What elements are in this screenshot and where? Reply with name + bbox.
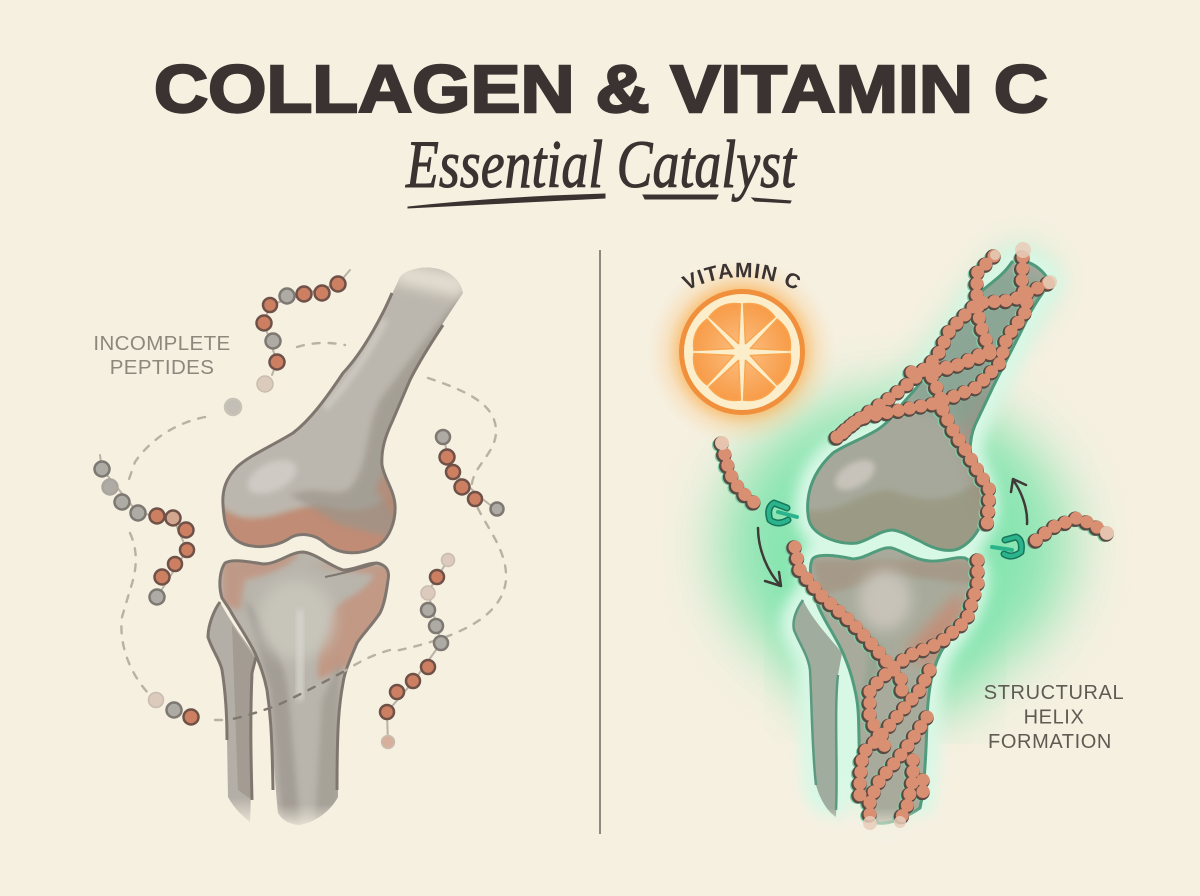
peptide chain: top [225,270,350,415]
icon: glowing fibula [793,600,842,817]
faded strand ends [715,242,1114,830]
icon: glowing tibia [810,548,976,835]
icon: enzyme clip left [769,503,797,523]
label: structural helix formation: STRUCTURAL [984,682,1124,704]
peptide chain: right [436,430,504,516]
label: structural helix formation: FORMATION [988,731,1112,753]
divider [599,250,601,834]
peptide chain: left [94,455,194,604]
label: vitamin c curved: VITAMIN C [680,262,800,288]
panel: right, helix formation [654,232,1124,830]
label: incomplete peptides: PEPTIDES [110,356,214,379]
icon: glowing femur [805,260,1050,560]
label: structural helix formation: HELIX [1024,706,1084,728]
title: COLLAGEN & VITAMIN C [154,52,1048,127]
arrow: down into tibia [758,528,781,586]
icon: orange slice [647,257,837,447]
icon: enzyme clip right [992,537,1021,556]
icon: bone tibia [220,552,392,832]
icon: bone femur [221,268,463,554]
arrow: up to femur [1011,479,1027,524]
collagen helix strands [719,250,1107,825]
peptide chain: lower right [380,554,454,748]
subtitle: Essential Catalyst: Essential Catalyst [405,126,798,202]
peptide chain: bottom [148,692,198,724]
panel: left, incomplete peptides [93,262,506,832]
dashed orbit path across bones [208,650,390,720]
icon: bone fibula [206,601,256,822]
green glow [720,261,1070,850]
dashed orbit path behind bones [121,343,506,695]
label: incomplete peptides: INCOMPLETE [93,332,231,355]
